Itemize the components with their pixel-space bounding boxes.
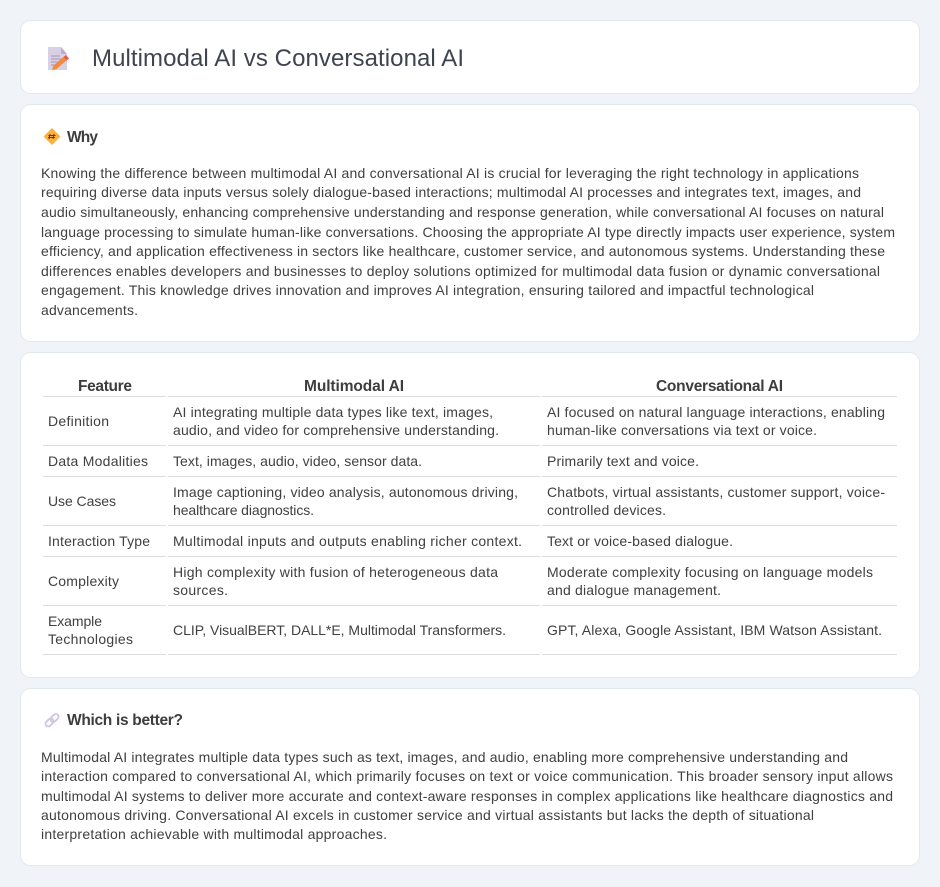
table row rules xyxy=(43,396,897,655)
icon: link xyxy=(44,713,60,728)
panel: header xyxy=(20,20,920,94)
text block: why paragraph: differences enables developers and businesses to deploy solutions optimized for multimodal data fusion or dynamic conversational xyxy=(41,263,880,279)
text block: which is better paragraph xyxy=(41,749,893,842)
row: interaction type: Interaction Type xyxy=(48,533,150,549)
text block: which is better paragraph: Multimodal AI integrates multiple data types such as text, images, and audio, enabling more comprehensive understanding and xyxy=(41,749,848,765)
text block: why paragraph: Knowing the difference between multimodal AI and conversational AI is crucial for leveraging the right technology in applications xyxy=(41,165,859,181)
text block: why paragraph: engagement. This knowledge drives innovation and improves AI integration, ensuring tailored and impactful technological xyxy=(41,282,814,298)
row: interaction type: Text or voice-based dialogue. xyxy=(547,533,733,549)
row: complexity: sources. xyxy=(173,582,228,598)
panel: comparison table xyxy=(20,352,920,678)
row: definition xyxy=(48,404,885,438)
table header row: Multimodal AI xyxy=(304,378,404,395)
row: complexity: and dialogue management. xyxy=(547,582,721,598)
row: use cases: Image captioning, video analysis, autonomous driving, xyxy=(173,484,518,500)
text block: why paragraph: language processing to simulate human-like conversations. Choosing the appropriate AI type directly impacts user experience, system xyxy=(41,224,895,240)
row: use cases: controlled devices. xyxy=(547,502,666,518)
row: complexity: Complexity xyxy=(48,573,119,589)
panel: which is better xyxy=(20,688,920,866)
text block: which is better paragraph: interpretation achievable with multimodal approaches. xyxy=(41,826,387,842)
row: complexity: Moderate complexity focusing on language models xyxy=(547,564,873,580)
text block: which is better paragraph: interaction compared to conversational AI, which primarily focuses on text or voice communication. This broader sensory input allows xyxy=(41,768,893,784)
row: complexity: High complexity with fusion of heterogeneous data xyxy=(173,564,498,580)
row: example technologies: Example xyxy=(48,613,102,629)
row: example technologies: CLIP, VisualBERT, DALL*E, Multimodal Transformers. xyxy=(173,622,506,638)
row: interaction type: Multimodal inputs and outputs enabling richer context. xyxy=(173,533,522,549)
text block: which is better paragraph: autonomous driving. Conversational AI excels in customer service and virtual assistants but lacks the depth of situational xyxy=(41,807,814,823)
row: data modalities: Primarily text and voice. xyxy=(547,453,699,469)
row: example technologies: GPT, Alexa, Google Assistant, IBM Watson Assistant. xyxy=(547,622,882,638)
row: use cases xyxy=(48,484,885,518)
row: definition: audio, and video for comprehensive understanding. xyxy=(173,422,499,438)
row: definition: human-like conversations via text or voice. xyxy=(547,422,817,438)
row: definition: Definition xyxy=(48,413,109,429)
heading: which is better: Which is better? xyxy=(67,712,183,729)
row: use cases: healthcare diagnostics. xyxy=(173,502,314,518)
table header row xyxy=(78,378,783,395)
title: Multimodal AI vs Conversational AI xyxy=(92,45,464,72)
row: definition: AI focused on natural language interactions, enabling xyxy=(547,404,885,420)
row: example technologies: Technologies xyxy=(48,631,133,647)
row: interaction type xyxy=(48,533,733,549)
icon: diamond warning sign xyxy=(44,128,60,145)
row: data modalities: Text, images, audio, video, sensor data. xyxy=(173,453,422,469)
row: use cases: Chatbots, virtual assistants, customer support, voice- xyxy=(547,484,885,500)
text block: why paragraph: requiring diverse data inputs versus solely dialogue-based interactions; multimodal AI processes and integrates text, images, and xyxy=(41,184,861,200)
row: data modalities: Data Modalities xyxy=(48,453,148,469)
text block: why paragraph xyxy=(41,165,895,318)
icon: document with pencil xyxy=(48,47,69,70)
heading: why: Why xyxy=(67,129,98,146)
panel: why xyxy=(20,104,920,342)
row: data modalities xyxy=(48,453,699,469)
row: example technologies xyxy=(48,613,882,647)
row: complexity xyxy=(48,564,873,598)
row: definition: AI integrating multiple data types like text, images, xyxy=(173,404,493,420)
text block: why paragraph: advancements. xyxy=(41,302,138,318)
text block: why paragraph: efficiency, and application effectiveness in sectors like healthcare, customer service, and autonomous systems. Understanding these xyxy=(41,243,885,259)
row: use cases: Use Cases xyxy=(48,493,116,509)
text block: which is better paragraph: multimodal AI systems to deliver more accurate and context-aware responses in complex applications like healthcare diagnostics and xyxy=(41,788,893,804)
table header row: Conversational AI xyxy=(656,378,783,395)
text block: why paragraph: audio simultaneously, enhancing comprehensive understanding and response generation, while conversational AI focuses on natural xyxy=(41,204,884,220)
table header row: Feature xyxy=(78,378,132,395)
